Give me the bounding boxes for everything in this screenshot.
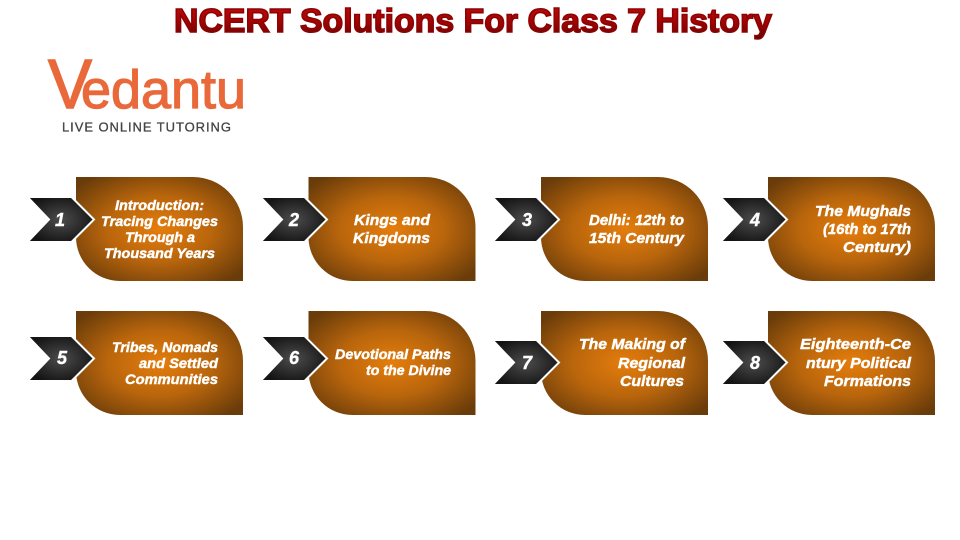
text: chapter 5 title: and Settled	[139, 355, 218, 371]
chevron: number 2: 2	[288, 210, 299, 230]
chevron: number 5: 5	[57, 348, 68, 368]
text: chapter 2 title: Kings and	[354, 212, 431, 229]
text: chapter 5 title	[112, 339, 218, 387]
text: chapter 1 title: Introduction:	[115, 197, 204, 213]
title: NCERT Solutions For Class 7 History	[174, 2, 773, 39]
text: chapter 1 title: Thousand Years	[104, 245, 215, 261]
logo: Vedantu: LIVE ONLINE TUTORING	[62, 120, 231, 134]
logo: Vedantu: V	[48, 45, 92, 123]
panel: chapter 7	[492, 311, 708, 415]
text: chapter 5 title: Communities	[125, 371, 218, 387]
panel: chapter 3	[492, 177, 708, 281]
panel: chapter 1	[28, 177, 243, 281]
text: chapter 6 title	[335, 346, 451, 378]
chevron: number 7	[492, 340, 559, 385]
panel: chapter 5	[28, 311, 243, 415]
chevron: number 6	[260, 336, 327, 381]
chevron: number 7: 7	[522, 353, 533, 373]
chevron: number 1	[28, 197, 94, 242]
text: chapter 4 title: Century)	[843, 239, 911, 256]
text: chapter 3 title: 15th Century	[589, 230, 685, 247]
text: chapter 8 title: Formations	[824, 373, 911, 390]
text: chapter 8 title: Eighteenth-Ce	[800, 336, 911, 353]
logo: Vedantu	[48, 45, 246, 134]
text: chapter 2 title	[353, 212, 431, 247]
panel: chapter 2	[260, 177, 476, 281]
text: chapter 2 title: Kingdoms	[353, 230, 430, 247]
text: chapter 7 title: The Making of	[579, 336, 687, 353]
chevron: number 5	[28, 336, 94, 381]
text: chapter 3 title: Delhi: 12th to	[589, 212, 684, 229]
chevron: number 3	[492, 197, 559, 242]
text: chapter 6 title: Devotional Paths	[335, 346, 451, 362]
chevron: number 8	[720, 340, 787, 385]
text: chapter 7 title	[579, 336, 687, 390]
text: chapter 7 title: Regional	[618, 355, 686, 372]
chevron: number 1: 1	[55, 210, 65, 230]
panel: chapter 8	[720, 311, 935, 415]
text: chapter 4 title: The Mughals	[815, 203, 911, 220]
text: chapter 1 title: Tracing Changes	[101, 213, 218, 229]
chevron: number 4	[720, 197, 787, 242]
chevron: number 8: 8	[750, 353, 760, 373]
text: chapter 5 title: Tribes, Nomads	[112, 339, 218, 355]
text: chapter 1 title: Through a	[125, 229, 195, 245]
text: chapter 8 title: ntury Political	[806, 355, 912, 372]
text: chapter 6 title: to the Divine	[366, 362, 451, 378]
chevron: number 6: 6	[289, 348, 300, 368]
text: chapter 3 title	[589, 212, 685, 247]
chevron: number 4: 4	[749, 210, 760, 230]
text: chapter 8 title	[800, 336, 912, 390]
chevron: number 2	[260, 197, 327, 242]
text: chapter 1 title	[101, 197, 218, 261]
chevron: number 3: 3	[522, 210, 532, 230]
logo: Vedantu: edantu	[81, 60, 246, 120]
text: chapter 4 title: (16th to 17th	[823, 221, 911, 238]
text: chapter 4 title	[815, 203, 911, 256]
panel: chapter 6	[260, 311, 476, 415]
panel: chapter 4	[720, 177, 935, 281]
text: chapter 7 title: Cultures	[620, 373, 684, 390]
